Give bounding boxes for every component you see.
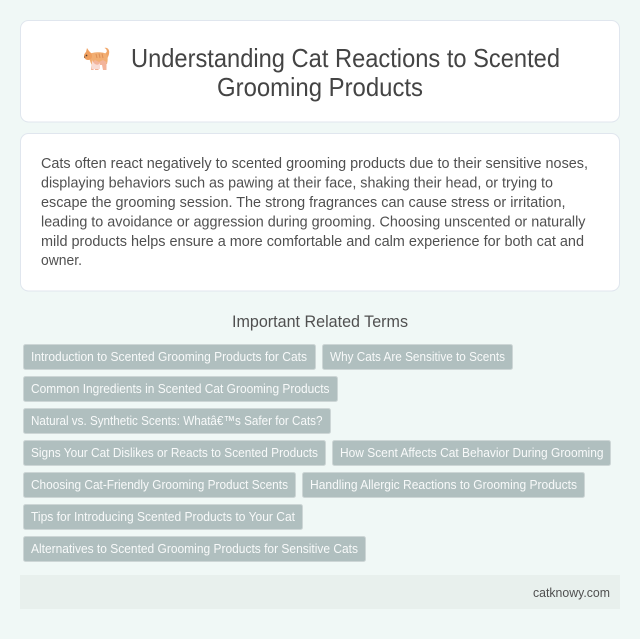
pill: alternatives — [24, 536, 366, 562]
pill: choosing cat-friendly: Choosing Cat-Friendly Grooming Product Scents — [31, 477, 288, 492]
pill: why cats are sensitive: Why Cats Are Sensitive to Scents — [330, 349, 505, 364]
pill: common ingredients: Common Ingredients in Scented Cat Grooming Products — [31, 381, 330, 396]
heading: important related terms: Important Related Terms — [232, 313, 408, 331]
term pills — [24, 344, 610, 562]
description text: displaying behaviors such as pawing at their face, shaking their head, or trying to — [41, 174, 553, 192]
description text — [41, 155, 588, 269]
pill: handling allergic reactions: Handling Allergic Reactions to Grooming Products — [310, 477, 577, 492]
pill: how scent affects behavior — [332, 440, 610, 466]
footer bar — [20, 575, 620, 609]
title text: Understanding Cat Reactions to Scented — [131, 45, 560, 73]
description text: Cats often react negatively to scented grooming products due to their sensitive noses, — [41, 155, 588, 172]
pill: tips for introducing: Tips for Introducing Scented Products to Your Cat — [31, 509, 295, 524]
title text — [131, 45, 560, 102]
pill: tips for introducing — [24, 504, 302, 530]
pill: signs your cat dislikes — [24, 440, 326, 466]
pill: alternatives: Alternatives to Scented Grooming Products for Sensitive Cats — [31, 541, 358, 556]
footer text: catknowy.com — [533, 585, 610, 600]
title text: Grooming Products — [217, 74, 423, 102]
pill: why cats are sensitive — [322, 344, 512, 370]
description text: leading to avoidance or aggression during grooming. Choosing unscented or naturally — [41, 214, 586, 230]
panel: title card — [20, 20, 620, 122]
description text: owner. — [41, 252, 82, 269]
pill: choosing cat-friendly — [24, 472, 296, 498]
pill: how scent affects behavior: How Scent Affects Cat Behavior During Grooming — [340, 445, 604, 460]
description text: mild products helps ensure a more comfortable and calm experience for both cat and — [41, 233, 584, 250]
panel: description card — [20, 134, 620, 291]
icon: cat — [84, 48, 109, 70]
pill: signs your cat dislikes: Signs Your Cat Dislikes or Reacts to Scented Products — [31, 445, 318, 460]
description text: escape the grooming session. The strong fragrances can cause stress or irritation, — [41, 194, 566, 211]
pill: handling allergic reactions — [302, 472, 584, 498]
pill: common ingredients — [24, 376, 338, 402]
pill: introduction: Introduction to Scented Grooming Products for Cats — [31, 349, 307, 364]
pill: natural vs synthetic — [24, 408, 330, 434]
pill: natural vs synthetic: Natural vs. Synthetic Scents: Whatâ€™s Safer for Cats? — [31, 413, 322, 428]
pill: introduction — [24, 344, 316, 370]
